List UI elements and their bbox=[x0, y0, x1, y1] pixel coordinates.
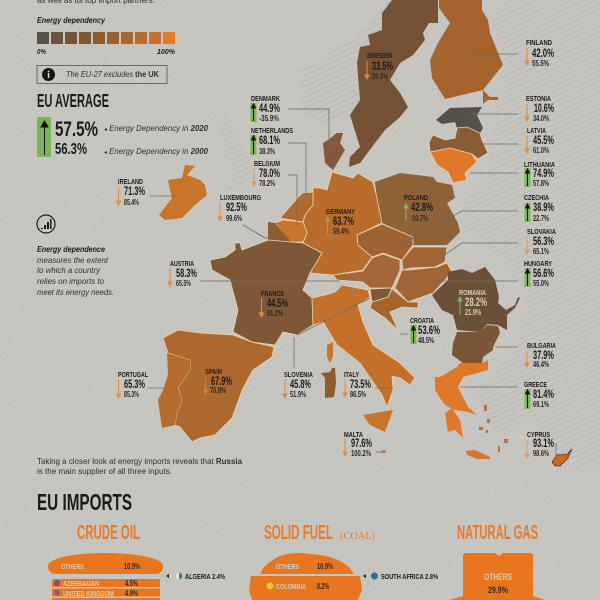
Luxembourg bbox=[268, 222, 292, 242]
section heading: EU imports: EU IMPORTS bbox=[37, 489, 132, 515]
label: Romania bbox=[458, 288, 487, 317]
label: Finland: 42.0% bbox=[532, 48, 554, 60]
Greece bbox=[435, 360, 488, 415]
label: Germany: GERMANY bbox=[326, 207, 355, 216]
label: Romania: 28.2% bbox=[465, 297, 487, 309]
label: Romania: 21.9% bbox=[465, 308, 481, 317]
label: Hungary bbox=[524, 259, 554, 288]
label: Slovakia: SLOVAKIA bbox=[527, 227, 556, 236]
legend: energy dependency bbox=[37, 16, 176, 56]
label: Ireland: 85.4% bbox=[124, 198, 139, 207]
label: Sweden: SWEDEN bbox=[367, 51, 392, 60]
label: Bulgaria: 46.4% bbox=[533, 360, 549, 369]
Czechia bbox=[357, 224, 413, 260]
2000 value: 56.3% bbox=[55, 141, 87, 158]
note text: The EU-27 excludes the UK bbox=[66, 70, 159, 79]
label: Italy: 86.5% bbox=[350, 390, 366, 399]
Peloponnese bbox=[445, 408, 463, 438]
others label: OTHERS bbox=[61, 562, 84, 571]
definition text: to which a country bbox=[37, 266, 101, 275]
callout: Algeria: ALGERIA 2.4% bbox=[185, 572, 225, 581]
label: Croatia: CROATIA bbox=[410, 316, 434, 325]
Colombia label: COLOMBIA bbox=[276, 582, 306, 591]
panel: solid fuel bbox=[249, 522, 375, 600]
definition text: meet its energy needs. bbox=[37, 288, 114, 297]
label: Czechia: 22.7% bbox=[533, 214, 549, 223]
label: Poland: 42.8% bbox=[411, 202, 433, 214]
label: Croatia: 48.5% bbox=[418, 336, 434, 345]
Ireland bbox=[159, 165, 207, 220]
icon: info bbox=[42, 68, 55, 81]
label: Finland: 55.5% bbox=[532, 59, 549, 68]
label: Luxembourg: LUXEMBOURG bbox=[220, 193, 261, 202]
label: Malta: 97.6% bbox=[351, 438, 372, 450]
Sicily bbox=[363, 410, 393, 432]
label: Latvia: 45.5% bbox=[533, 135, 554, 147]
solid fuel others band bbox=[261, 553, 354, 574]
label: Ireland: IRELAND bbox=[118, 177, 143, 186]
label: Lithuania: 57.8% bbox=[533, 179, 549, 188]
crude oil others band bbox=[48, 553, 163, 574]
label: Hungary: HUNGARY bbox=[524, 259, 552, 268]
label: Malta bbox=[343, 430, 372, 458]
label: Italy bbox=[343, 370, 371, 399]
label: Slovenia: SLOVENIA bbox=[284, 370, 313, 379]
Poland bbox=[375, 173, 460, 245]
Azerbaijan value: 4.5% bbox=[125, 579, 138, 588]
label: Luxembourg: 92.5% bbox=[226, 202, 247, 214]
label: Luxembourg: 99.6% bbox=[226, 214, 242, 223]
callout: Algeria bbox=[166, 572, 225, 581]
UK value: 4.9% bbox=[125, 589, 138, 598]
label: Spain: 67.9% bbox=[211, 376, 232, 388]
legend title: Energy dependency bbox=[37, 16, 105, 25]
label: Slovenia bbox=[283, 370, 313, 399]
label: Sweden bbox=[365, 51, 393, 81]
label: Cyprus: 93.1% bbox=[533, 438, 554, 450]
label: Estonia: 34.0% bbox=[533, 114, 549, 123]
definition text bbox=[37, 245, 114, 297]
label: Denmark: DENMARK bbox=[251, 94, 280, 103]
label: Denmark: 44.9% bbox=[259, 103, 280, 115]
solid fuel heading: SOLID FUEL bbox=[264, 522, 333, 544]
flag: Colombia bbox=[266, 582, 274, 590]
Germany bbox=[303, 172, 382, 275]
Spain bbox=[163, 330, 274, 442]
flag: UK bbox=[54, 590, 60, 596]
transition text bbox=[37, 457, 243, 476]
Latvia bbox=[429, 127, 488, 159]
Finland bbox=[430, 0, 503, 99]
2020 caption: ◂ Energy Dependency in 2020 bbox=[104, 124, 209, 133]
Estonia bbox=[436, 107, 483, 133]
label: Austria bbox=[168, 259, 197, 288]
label: Greece: 81.4% bbox=[533, 389, 554, 401]
natural gas others block bbox=[450, 553, 545, 600]
label: Slovenia: 51.9% bbox=[290, 390, 306, 399]
Colombia value: 8.2% bbox=[317, 582, 329, 591]
label: Croatia bbox=[410, 316, 440, 345]
definition text: measures the extent bbox=[37, 256, 109, 265]
label: Lithuania bbox=[524, 160, 555, 188]
label: Germany: 59.4% bbox=[333, 227, 349, 236]
others value: 10.9% bbox=[124, 562, 140, 571]
label: Austria: AUSTRIA bbox=[170, 259, 194, 268]
label: France bbox=[260, 289, 288, 318]
label: Spain: SPAIN bbox=[205, 367, 222, 376]
Sweden bbox=[349, 0, 438, 167]
transition text: is the main supplier of all three inputs. bbox=[37, 467, 172, 476]
label: Slovakia: 65.1% bbox=[533, 247, 549, 256]
label: Slovakia: 56.3% bbox=[533, 236, 554, 248]
label: Denmark bbox=[250, 94, 280, 123]
label: Germany bbox=[326, 207, 355, 236]
coal qualifier: (COAL) bbox=[340, 530, 375, 542]
label: Romania: ROMANIA bbox=[459, 288, 486, 297]
label: Portugal: 65.3% bbox=[124, 379, 145, 391]
label: Czechia bbox=[524, 193, 554, 223]
label: Netherlands bbox=[250, 126, 293, 156]
Romania bbox=[432, 267, 520, 332]
label: Netherlands: NETHERLANDS bbox=[251, 126, 293, 135]
leader lines bbox=[148, 54, 556, 455]
label: Malta: MALTA bbox=[344, 430, 363, 439]
others value: 29.9% bbox=[488, 585, 508, 595]
label: Sweden: 33.5% bbox=[372, 61, 393, 73]
label: Denmark: -35.9% bbox=[259, 114, 279, 123]
crude oil heading: CRUDE OIL bbox=[77, 522, 140, 544]
France bbox=[210, 240, 322, 345]
Slovenia bbox=[370, 288, 392, 302]
callout: South Africa bbox=[363, 572, 438, 581]
Corsica bbox=[327, 342, 333, 363]
others value: 10.9% bbox=[317, 562, 333, 571]
Sardinia bbox=[321, 368, 336, 398]
Lithuania bbox=[430, 148, 477, 183]
label: Lithuania: LITHUANIA bbox=[524, 160, 555, 169]
label: Belgium: 78.0% bbox=[259, 168, 280, 180]
others label: OTHERS bbox=[276, 562, 299, 571]
definition text: Energy dependence bbox=[37, 245, 105, 254]
crude oil Azerbaijan row bbox=[52, 579, 160, 587]
label: Poland bbox=[404, 193, 433, 223]
label: Netherlands: 68.1% bbox=[259, 135, 280, 147]
label: Ireland bbox=[116, 177, 145, 207]
Aland island bbox=[483, 90, 498, 104]
Netherlands bbox=[280, 192, 313, 222]
label: Belgium bbox=[252, 159, 280, 188]
label: Portugal bbox=[116, 370, 148, 399]
label: Hungary: 55.0% bbox=[533, 279, 549, 288]
label: Estonia: 10.6% bbox=[534, 103, 554, 115]
label: Greece: GREECE bbox=[524, 380, 547, 389]
label: Malta: 100.2% bbox=[351, 449, 371, 458]
Portugal bbox=[158, 353, 190, 428]
label: Cyprus: 98.6% bbox=[533, 449, 549, 458]
label: Cyprus: CYPRUS bbox=[527, 430, 550, 439]
label: Greece bbox=[524, 380, 554, 409]
label: Luxembourg bbox=[218, 193, 261, 223]
label: Austria: 65.5% bbox=[176, 279, 191, 288]
label: Poland: POLAND bbox=[404, 193, 428, 202]
label: Cyprus bbox=[525, 430, 554, 458]
Colombia row bbox=[249, 576, 362, 600]
Cyprus bbox=[552, 449, 572, 466]
flag: Azerbaijan bbox=[54, 580, 60, 586]
label: Ireland: 71.3% bbox=[124, 186, 145, 198]
Greek islands bbox=[479, 405, 508, 452]
label: Latvia bbox=[525, 126, 554, 155]
callout: South Africa: SOUTH AFRICA 2.8% bbox=[381, 572, 438, 581]
legend scale start: 0% bbox=[37, 49, 47, 56]
label: Italy: 73.5% bbox=[350, 379, 371, 391]
Austria bbox=[333, 254, 400, 288]
Belgium bbox=[275, 220, 307, 242]
label: Bulgaria bbox=[525, 341, 556, 369]
label: Latvia: 61.0% bbox=[533, 146, 549, 155]
label: Portugal: 85.3% bbox=[124, 390, 139, 399]
label: France: 44.5% bbox=[267, 298, 288, 310]
green up arrow bbox=[37, 117, 51, 157]
legend swatches bbox=[37, 32, 175, 44]
panel: natural gas bbox=[450, 522, 545, 600]
label: Austria: 58.3% bbox=[176, 268, 197, 280]
others label: OTHERS bbox=[484, 572, 512, 582]
label: Italy: ITALY bbox=[344, 370, 359, 379]
definition text: relies on imports to bbox=[37, 277, 105, 286]
label: Poland: 10.7% bbox=[412, 214, 428, 223]
2020 value: 57.5% bbox=[55, 118, 98, 141]
label: Spain bbox=[204, 367, 232, 395]
Crete bbox=[466, 450, 490, 459]
label: Greece: 69.1% bbox=[533, 400, 549, 409]
label: Bulgaria: BULGARIA bbox=[527, 341, 556, 350]
natural gas heading: NATURAL GAS bbox=[457, 522, 538, 544]
map of EU energy dependency bbox=[158, 0, 572, 466]
Italy bbox=[312, 285, 415, 407]
note box: EU-27 bbox=[37, 66, 167, 84]
Slovakia bbox=[402, 247, 447, 270]
UK label: UNITED KINGDOM bbox=[63, 589, 114, 598]
label: Latvia: LATVIA bbox=[527, 126, 546, 135]
legend scale end: 100% bbox=[157, 49, 176, 56]
label: Lithuania: 74.9% bbox=[533, 168, 554, 180]
label: Estonia: ESTONIA bbox=[526, 94, 551, 103]
label: Belgium: 78.2% bbox=[259, 179, 275, 188]
label: Hungary: 56.6% bbox=[533, 268, 554, 280]
panel: crude oil bbox=[48, 522, 163, 600]
label: Portugal: PORTUGAL bbox=[118, 370, 148, 379]
label: Croatia: 53.6% bbox=[418, 325, 440, 337]
label: Estonia bbox=[525, 94, 554, 123]
label: Czechia: 38.9% bbox=[533, 202, 554, 214]
2000 caption: ◂ Energy Dependency in 2000 bbox=[104, 147, 209, 156]
crude oil next row bbox=[52, 598, 160, 600]
Bulgaria bbox=[452, 325, 500, 363]
label: Bulgaria: 37.9% bbox=[533, 350, 554, 362]
crude oil UK row bbox=[52, 588, 160, 596]
label: Finland bbox=[525, 38, 554, 68]
Azerbaijan label: AZERBAIJAN bbox=[63, 579, 99, 588]
label: Belgium: BELGIUM bbox=[254, 159, 280, 168]
EU average heading: EU AVERAGE bbox=[37, 91, 109, 111]
label: Germany: 63.7% bbox=[333, 216, 354, 228]
label: Sweden: 29.3% bbox=[372, 72, 388, 81]
transition text: Taking a closer look at energy imports reveals that Russia bbox=[37, 457, 243, 466]
icon: rising bars bbox=[37, 215, 55, 233]
label: Netherlands: 38.3% bbox=[259, 147, 275, 156]
label: Czechia: CZECHIA bbox=[524, 193, 549, 202]
label: France: FRANCE bbox=[261, 289, 284, 298]
label: Finland: FINLAND bbox=[526, 38, 552, 47]
label: Spain: 76.8% bbox=[210, 386, 226, 395]
Denmark bbox=[323, 133, 345, 170]
Hungary bbox=[395, 263, 452, 302]
label: Slovakia bbox=[525, 227, 556, 256]
label: France: 51.2% bbox=[267, 309, 283, 318]
label: Slovenia: 45.8% bbox=[290, 379, 311, 391]
Croatia bbox=[370, 289, 418, 330]
EU average figures bbox=[37, 117, 209, 158]
Malta bbox=[382, 450, 386, 453]
